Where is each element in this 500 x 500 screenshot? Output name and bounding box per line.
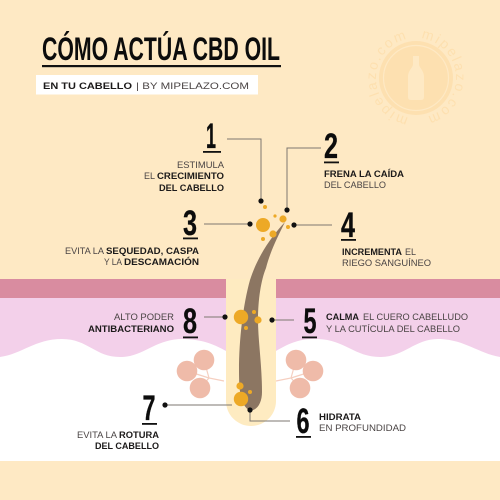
subtitle (36, 75, 258, 94)
callout 3: SEQUEDAD, CASPA (106, 245, 199, 256)
callout 3: EVITA LA (65, 245, 105, 256)
callout 5 (269, 302, 468, 341)
callout 2: DEL CABELLO (324, 179, 386, 190)
callout 6: 6 (296, 402, 310, 441)
callout 8 (88, 302, 228, 341)
callout 4 (291, 206, 431, 268)
callout 7: ROTURA (119, 429, 159, 440)
callout 1: EL (144, 170, 155, 181)
callout 2: FRENA LA CAÍDA (324, 168, 404, 179)
watermark stamp: mipelazo.com (368, 32, 408, 124)
callout 1: ESTIMULA (177, 159, 225, 170)
callout 7 (77, 389, 232, 451)
callout 1: 1 (206, 117, 216, 156)
subtitle: | BY MIPELAZO.COM (136, 81, 249, 92)
callout 8: ANTIBACTERIANO (88, 323, 174, 334)
oil drops in dermis (234, 310, 262, 330)
callout 1: DEL CABELLO (159, 182, 224, 193)
fat cells left (177, 350, 224, 398)
callout 5: Y LA CUTÍCULA DEL CABELLO (326, 323, 460, 334)
skin layers (0, 279, 500, 461)
callout 7: EVITA LA (77, 429, 118, 440)
callout 5: CALMA (326, 311, 359, 322)
callout 3 (65, 204, 253, 267)
callout 3: DESCAMACIÓN (124, 256, 199, 267)
callout 3: 3 (183, 204, 197, 243)
subtitle: EN TU CABELLO (43, 81, 132, 92)
callout 4: EL (405, 246, 416, 257)
follicle (226, 279, 276, 426)
callout 7: DEL CABELLO (95, 440, 159, 451)
callout 6: EN PROFUNDIDAD (319, 422, 406, 433)
callout 5: EL CUERO CABELLUDO (363, 311, 468, 322)
oil drops at scalp (256, 205, 290, 241)
callout 8: 8 (183, 302, 197, 341)
callout 6 (247, 402, 406, 441)
callout 8: ALTO PODER (114, 311, 174, 322)
callout 1 (144, 117, 264, 204)
title: CÓMO ACTÚA CBD OIL (42, 31, 280, 67)
hair strand (239, 222, 285, 411)
callout 4: RIEGO SANGUÍNEO (342, 257, 431, 268)
callout 4: 4 (341, 206, 355, 245)
callout 3: Y LA (104, 256, 123, 267)
callout 5: 5 (304, 302, 316, 341)
fat cells right (276, 350, 323, 398)
callout 1: CRECIMIENTO (157, 170, 224, 181)
watermark stamp: mipelazo.com (422, 31, 464, 122)
oil drops at bulb (234, 382, 252, 406)
callout 2: 2 (324, 127, 338, 166)
callout 4: INCREMENTA (342, 246, 402, 257)
callout 6: HIDRATA (319, 411, 361, 422)
callout 2 (284, 127, 404, 213)
callout 7: 7 (142, 389, 156, 428)
watermark stamp (368, 31, 464, 124)
